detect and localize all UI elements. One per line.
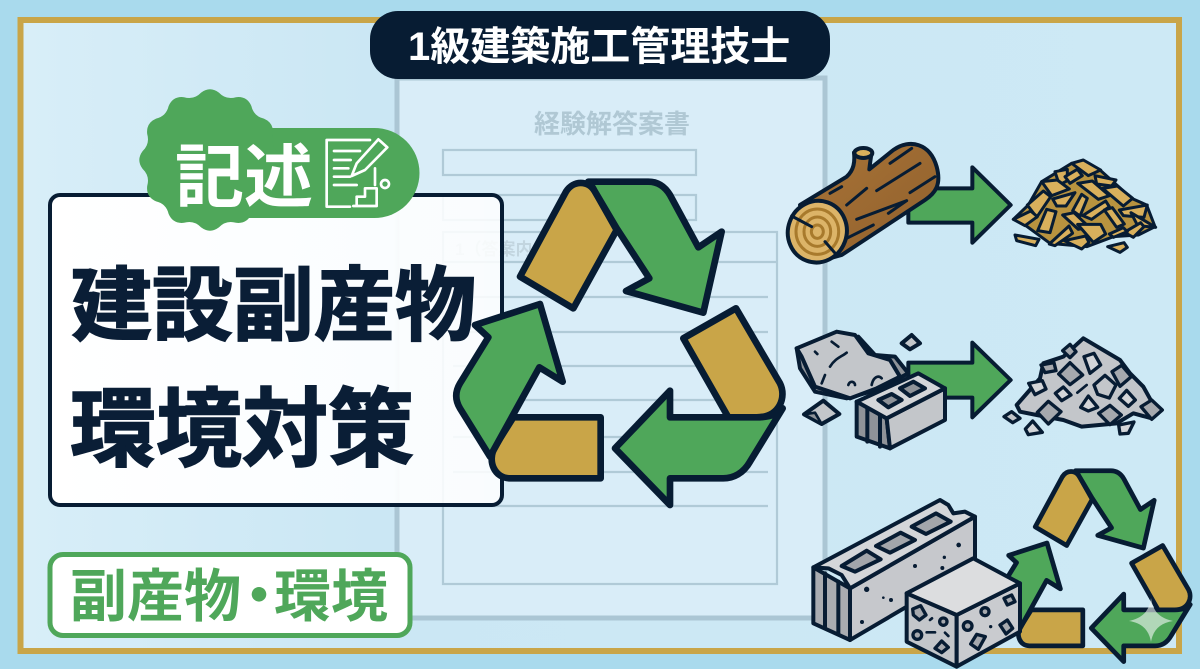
category tag: ・: [230, 565, 288, 629]
main title: 建設副産物: [71, 262, 476, 352]
icon: hollow concrete block: [813, 500, 975, 640]
category tag: [50, 554, 410, 636]
category tag: 環境: [274, 565, 388, 629]
icon: concrete cube: [907, 558, 1020, 667]
icon: document and pencil: [327, 139, 389, 207]
answer sheet document: [397, 78, 825, 618]
wood recycling row: [779, 144, 1156, 271]
title pill: 1級建築施工管理技士: [408, 25, 790, 69]
category tag: 副産物: [70, 565, 241, 629]
icon: crushed aggregate pile: [1004, 338, 1162, 435]
concrete recycling row: [797, 332, 1162, 448]
title pill: [370, 11, 830, 79]
icon: log: [779, 144, 938, 271]
answer boxes: [443, 150, 777, 584]
icon: concrete rubble: [797, 332, 945, 448]
badge: 記述: 記述: [175, 139, 313, 216]
recycling symbol large: [456, 182, 783, 505]
sparkle watermark: [1129, 598, 1173, 642]
badge: 記述: [139, 89, 420, 231]
arrow: log to chips: [908, 167, 1011, 243]
concrete blocks: [813, 500, 1020, 667]
recycling symbol small: [998, 471, 1190, 662]
main title: 環境対策: [70, 382, 414, 478]
main white panel: [50, 195, 502, 505]
main title: [70, 262, 476, 478]
arrow: rubble to aggregate: [908, 343, 1011, 417]
sheet answer text: 1（答案内: [455, 239, 532, 259]
sheet heading: 経験解答案書: [534, 109, 690, 139]
icon: wood chips: [1013, 160, 1156, 252]
